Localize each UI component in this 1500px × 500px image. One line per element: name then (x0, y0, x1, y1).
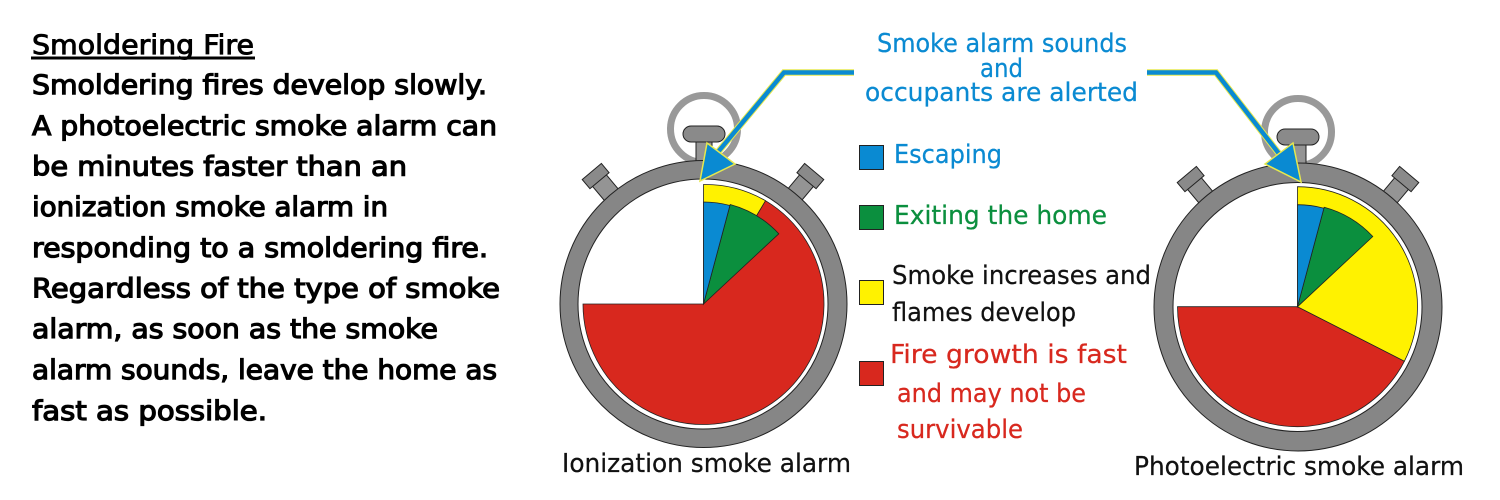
legend item: smoke increases: flames develop (892, 298, 1076, 328)
legend item: smoke increases (860, 261, 1151, 328)
callout: smoke alarm sounds: Smoke alarm sounds (877, 29, 1127, 59)
body paragraph: alarm sounds, leave the home as (32, 355, 497, 386)
icon: stopwatch body (1154, 98, 1442, 451)
legend item: smoke increases: Smoke increases and (892, 261, 1151, 291)
body paragraph: fast as possible. (32, 396, 267, 427)
body paragraph: A photoelectric smoke alarm can (32, 111, 497, 142)
callout: smoke alarm sounds (865, 29, 1138, 108)
body paragraph: be minutes faster than an (32, 152, 407, 182)
legend item: fire growth: Fire growth is fast (890, 340, 1127, 370)
arrow: left alarm callout (700, 72, 854, 181)
chart: ionization time segments (583, 184, 824, 425)
legend item: fire growth: and may not be (897, 379, 1086, 409)
body paragraph: Smoldering fires develop slowly. (32, 70, 487, 101)
stopwatch: photoelectric smoke alarm (1134, 98, 1464, 482)
chart: photoelectric time segments (1178, 187, 1417, 427)
body paragraph: ionization smoke alarm in (32, 192, 388, 223)
body paragraph: alarm, as soon as the smoke (32, 314, 438, 345)
text block: smoldering fire description (31, 30, 500, 427)
label: photoelectric smoke alarm: Photoelectric smoke alarm (1134, 452, 1464, 482)
label: ionization smoke alarm: Ionization smoke alarm (562, 449, 851, 479)
legend item: exiting the home: Exiting the home (894, 201, 1107, 231)
stopwatch: ionization smoke alarm (560, 96, 851, 479)
callout: smoke alarm sounds: and (980, 54, 1023, 84)
icon: stopwatch body (560, 96, 847, 448)
heading: Smoldering Fire: Smoldering Fire (32, 30, 254, 61)
body paragraph: Regardless of the type of smoke (32, 274, 500, 304)
legend (860, 140, 1151, 445)
legend item: fire growth: survivable (897, 415, 1023, 445)
arrow: right alarm callout (1147, 72, 1301, 182)
legend item: escaping: Escaping (894, 140, 1002, 170)
body paragraph: responding to a smoldering fire. (32, 233, 488, 264)
body paragraph (32, 70, 500, 427)
callout: smoke alarm sounds: occupants are alerted (865, 78, 1138, 108)
legend item: fire growth (860, 340, 1127, 445)
